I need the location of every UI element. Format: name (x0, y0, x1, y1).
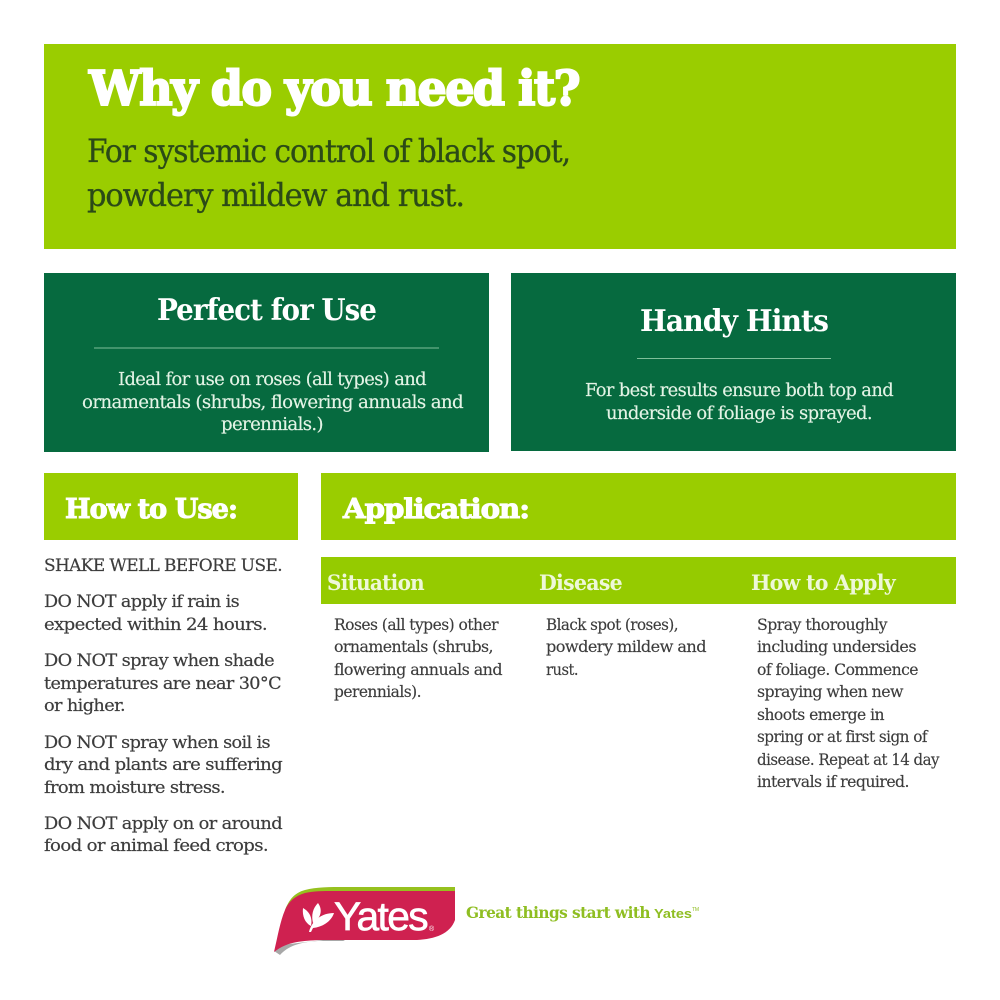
text: perfect for use description (82, 370, 463, 435)
text: how to use instructions (44, 556, 283, 856)
table: application header row (321, 557, 956, 604)
logo: yates: Yates (334, 895, 428, 939)
text: tagline: Yates (654, 906, 692, 921)
text: how to use instructions: DO NOT apply if rain is (44, 592, 239, 612)
text: situation column: flowering annuals and (334, 660, 502, 679)
panel: handy hints (511, 273, 956, 451)
text: disease column: Black spot (roses), (546, 615, 678, 634)
icon: leaf (303, 903, 334, 932)
panel: why do you need it (44, 44, 956, 249)
text: how to use instructions: temperatures are near 30°C (44, 674, 281, 694)
text: how to use instructions: DO NOT spray when soil is (44, 733, 270, 753)
logo: yates: ® (429, 925, 435, 933)
panel: perfect for use (44, 273, 489, 452)
text: how to apply column: disease. Repeat at 14 day (757, 750, 939, 769)
text: how to apply column: including undersides (757, 637, 916, 656)
text: how to apply column: of foliage. Commence (757, 660, 918, 679)
text: perfect for use description: perennials.) (221, 415, 323, 435)
text: how to use instructions: dry and plants are suffering (44, 755, 283, 775)
text: handy hints description: For best results ensure both top and (585, 381, 893, 401)
text: tagline: Great things start with (466, 903, 651, 922)
text: how to apply column: spraying when new (757, 682, 904, 701)
text: situation column: Roses (all types) other (334, 615, 499, 634)
text: disease column: powdery mildew and (546, 637, 706, 656)
text: how to use instructions: expected within 24 hours. (44, 615, 267, 635)
text: situation column: ornamentals (shrubs, (334, 637, 493, 656)
text: how to apply column: shoots emerge in (757, 705, 884, 724)
text: handy hints description (585, 381, 893, 424)
panel: how to use header (44, 473, 298, 540)
table: application header row: Disease (539, 571, 622, 596)
text: how to use instructions: from moisture stress. (44, 778, 225, 798)
text: how to use instructions: DO NOT spray when shade (44, 651, 275, 671)
text: tagline: TM (692, 907, 699, 913)
panel: how to use header: How to Use: (65, 494, 237, 525)
text: situation column: perennials). (334, 682, 421, 701)
text: how to use instructions: SHAKE WELL BEFORE USE. (44, 556, 282, 576)
heading: perfect for use: Perfect for Use (157, 293, 376, 328)
text: disease column: rust. (546, 660, 578, 679)
text: how to apply column: intervals if required. (757, 772, 909, 791)
panel: application header (321, 473, 956, 540)
text: how to use instructions: food or animal feed crops. (44, 836, 268, 856)
panel: application header: Application: (342, 494, 529, 525)
heading: handy hints: Handy Hints (640, 304, 828, 339)
text: perfect for use description: ornamentals (shrubs, flowering annuals and (82, 393, 463, 413)
text: handy hints description: underside of foliage is sprayed. (606, 404, 872, 424)
text: how to apply column: Spray thoroughly (757, 615, 888, 634)
heading: why do you need it: Why do you need it? (88, 61, 579, 117)
table: application header row: How to Apply (751, 571, 896, 596)
logo: yates (274, 887, 455, 955)
text: how to apply column (757, 615, 939, 791)
text: situation column (334, 615, 502, 701)
table: application header row: Situation (327, 571, 425, 596)
text: how to use instructions: or higher. (44, 696, 125, 716)
text: perfect for use description: Ideal for use on roses (all types) and (118, 370, 426, 390)
text: how to apply column: spring or at first sign of (757, 727, 929, 746)
text: purpose statement (87, 132, 570, 214)
text: purpose statement: powdery mildew and rust. (87, 176, 464, 214)
text: purpose statement: For systemic control of black spot, (87, 132, 570, 170)
text: disease column (546, 615, 706, 679)
text: how to use instructions: DO NOT apply on or around (44, 814, 283, 834)
